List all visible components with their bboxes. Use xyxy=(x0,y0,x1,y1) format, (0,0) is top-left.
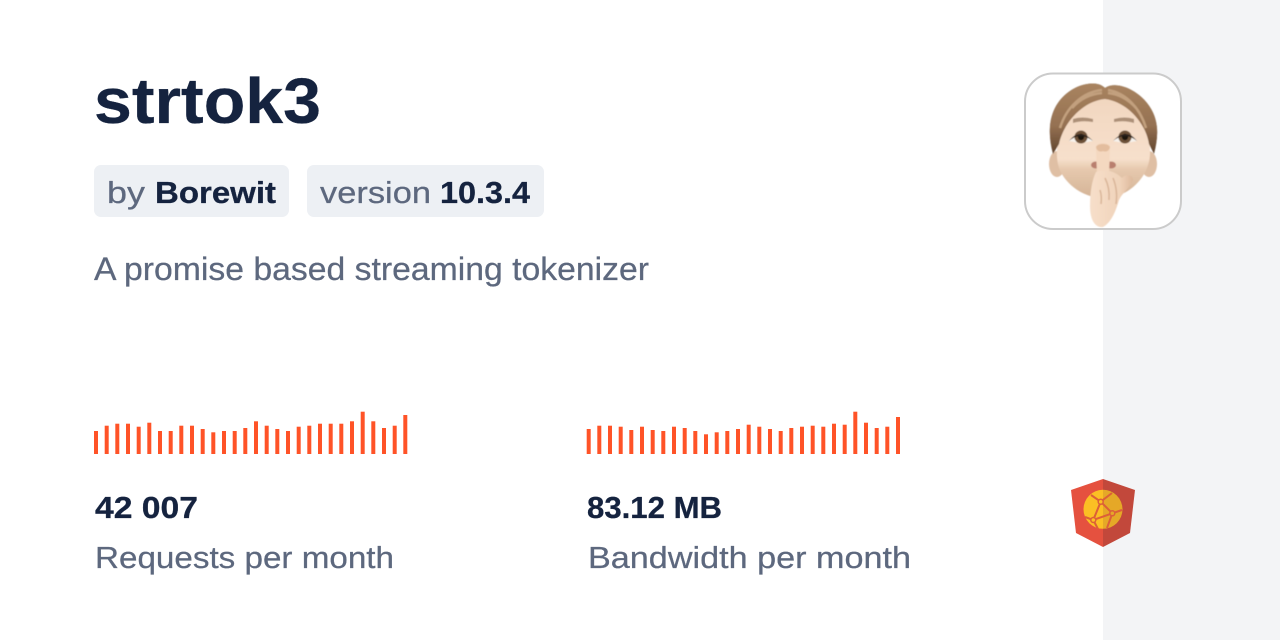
avatar frame xyxy=(1025,74,1181,229)
memoji illustration xyxy=(1049,83,1157,227)
badge: version xyxy=(307,165,544,217)
badge: author: by xyxy=(107,175,146,210)
stat: bandwidth label: Bandwidth per month xyxy=(588,540,911,575)
sparkline: requests per month xyxy=(94,412,407,454)
sparkline: bandwidth per month xyxy=(587,412,900,454)
badge: version: version xyxy=(320,175,431,210)
background: right sidebar xyxy=(1103,0,1280,640)
description: A promise based streaming tokenizer xyxy=(94,251,649,287)
title: strtok3 xyxy=(94,65,321,137)
icon: angular shield with globe xyxy=(1071,479,1135,547)
badge: version: 10.3.4 xyxy=(440,175,531,210)
stat: bandwidth value: 83.12 MB xyxy=(587,490,722,525)
stat: requests label: Requests per month xyxy=(95,540,394,575)
badge: author xyxy=(94,165,289,217)
avatar xyxy=(1025,74,1181,229)
stat: requests value: 42 007 xyxy=(95,490,198,525)
badge: author: Borewit xyxy=(155,175,276,210)
